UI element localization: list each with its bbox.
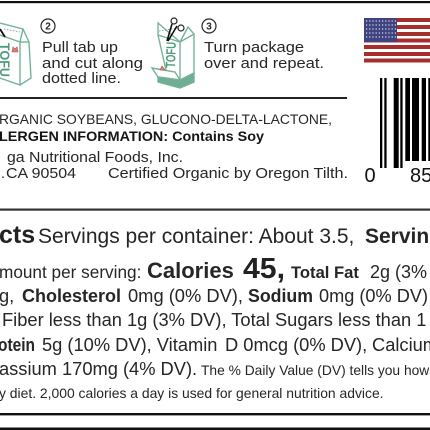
text: ingredients and allergen information: LERGEN INFORMATION: Contains Soy <box>0 128 264 144</box>
text: calories and nutrient list <box>0 253 430 401</box>
icon: tofu carton step 2 with scissors: TOFU <box>163 42 179 68</box>
text: calories and nutrient list: 0mg (0% DV) <box>319 285 428 306</box>
text: ingredients and allergen information <box>0 112 332 144</box>
text: step 2 instructions <box>42 39 143 87</box>
text: step 3 instructions: over and repeat. <box>204 55 324 72</box>
text: manufacturer and certification: Certified Organic by Oregon Tilth. <box>108 166 348 182</box>
icon: tofu carton step 2 with scissors <box>152 18 194 88</box>
text: calories and nutrient list: 5g (10% DV), Vitamin <box>42 334 217 355</box>
text: step 3 instructions <box>204 39 324 72</box>
text: calories and nutrient list: 0mg (0% DV), <box>128 285 243 306</box>
icon: step 2 number: 2 <box>45 22 51 32</box>
barcode: 0 <box>364 165 376 187</box>
icon: tofu carton step 1 <box>0 23 31 85</box>
icon: step 3 number <box>202 19 216 33</box>
text: calories and nutrient list: Total Fat <box>291 263 359 282</box>
text: ingredients and allergen information: RGANIC SOYBEANS, GLUCONO-DELTA-LACTONE, <box>0 112 332 127</box>
text: manufacturer and certification: CA 90504 <box>6 166 76 182</box>
text: step 2 instructions: Pull tab up <box>42 39 118 56</box>
text: step 2 instructions: dotted line. <box>42 70 121 87</box>
text: calories and nutrient list: Cholesterol <box>22 285 121 306</box>
heading: nutrition facts and servings: cts <box>0 221 35 249</box>
icon: american flag <box>364 18 430 63</box>
text: manufacturer and certification: . <box>1 166 5 182</box>
icon: step 3 number: 3 <box>206 22 212 32</box>
text: calories and nutrient list: mount per serving: <box>0 262 141 282</box>
text: calories and nutrient list: The % Daily Value (DV) tells you how <box>201 363 429 378</box>
text: step 3 instructions: Turn package <box>204 39 304 56</box>
text: calories and nutrient list: Calories <box>147 258 234 283</box>
text: calories and nutrient list: 2g (3% <box>370 262 427 282</box>
text: manufacturer and certification <box>1 150 348 182</box>
text: calories and nutrient list: D 0mcg (0% DV), <box>225 334 367 355</box>
text: calories and nutrient list: Fiber less than 1g (3% DV), Total Sugars less than 1 <box>2 309 426 330</box>
barcode <box>364 78 430 187</box>
heading: nutrition facts and servings: Servings per container: About 3.5, <box>38 225 354 248</box>
text: manufacturer and certification: ga Nutritional Foods, Inc. <box>7 150 183 166</box>
text: calories and nutrient list: assium 170mg (4% DV). <box>0 358 197 379</box>
text: calories and nutrient list: y diet. 2,000 calories a day is used for general nutrition advice. <box>0 385 384 401</box>
text: step 2 instructions: and cut along <box>42 55 143 72</box>
heading: nutrition facts and servings <box>0 221 430 249</box>
icon: step 2 number <box>41 19 55 33</box>
text: calories and nutrient list: 45, <box>243 253 285 285</box>
text: calories and nutrient list: Sodium <box>248 285 313 306</box>
